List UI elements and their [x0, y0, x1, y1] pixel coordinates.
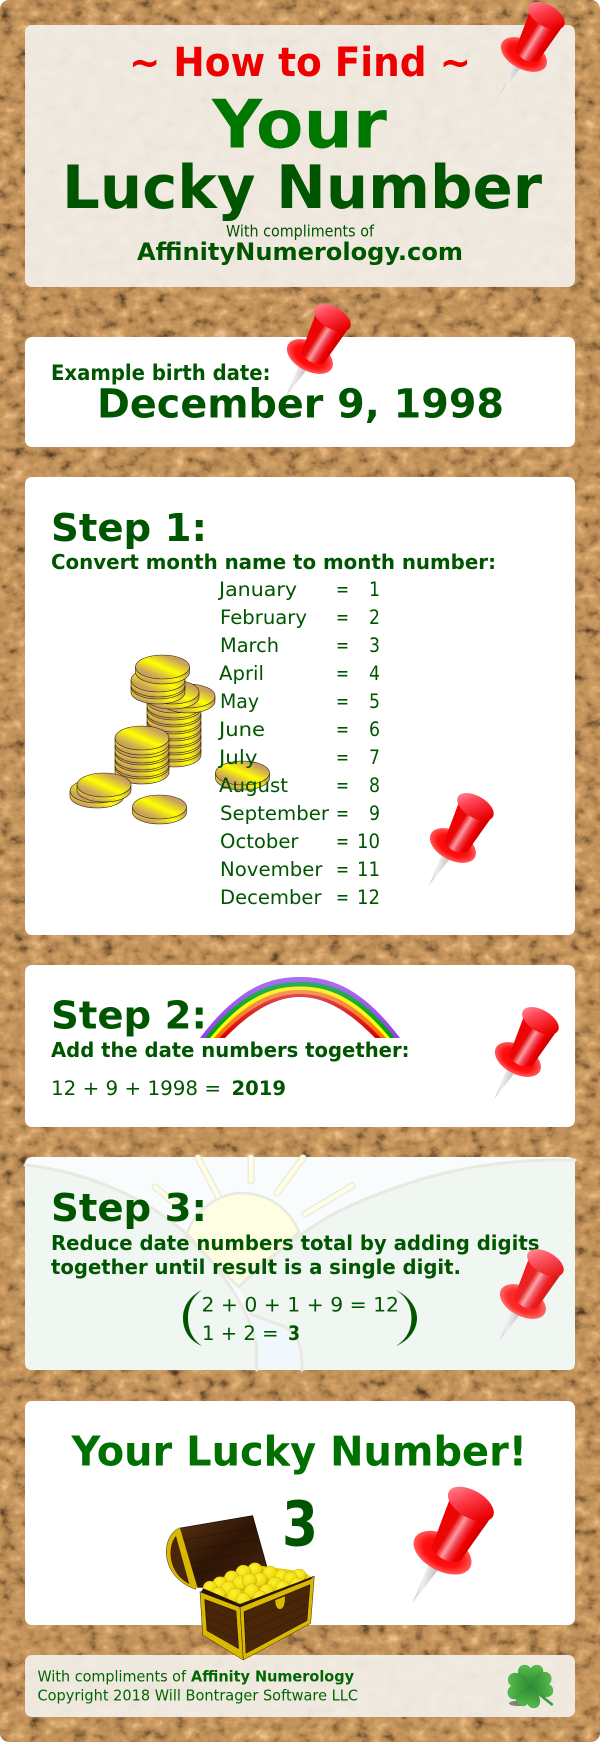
chest lock — [275, 1596, 285, 1609]
panel: footer — [25, 1655, 575, 1717]
month number table: 6 — [369, 718, 380, 741]
month number table: 3 — [369, 634, 380, 657]
result number 3: 3 — [282, 1488, 318, 1560]
text: step 2 instruction: Add the date numbers together: — [51, 1038, 410, 1062]
text: step 3 instruction: Reduce date numbers total by adding digits — [51, 1231, 540, 1255]
text: step 3 instruction: together until result is a single digit. — [51, 1255, 461, 1279]
month number table: May — [220, 690, 259, 713]
month number table: 4 — [369, 662, 380, 685]
month number table: = — [336, 662, 349, 685]
chest left face — [200, 1592, 243, 1660]
month number table: 2 — [369, 606, 380, 629]
icon: red push pin — [495, 0, 569, 94]
month number table: June — [217, 718, 265, 741]
month number table: February — [220, 606, 307, 629]
month number table: October — [220, 830, 299, 853]
month number table — [217, 578, 380, 909]
panel: example birth date — [25, 298, 575, 447]
panel: title — [25, 0, 575, 287]
gold treasure — [203, 1563, 313, 1607]
heading: your: Your — [211, 86, 387, 164]
icon: red push pin — [489, 1001, 563, 1099]
icon: four leaf clover — [508, 1665, 554, 1709]
chest lid side — [166, 1528, 196, 1589]
month number table: November — [220, 858, 323, 881]
panel: step 3 — [25, 1157, 575, 1370]
text: step 1 instruction: Convert month name to month number: — [51, 550, 496, 574]
equation with parentheses: 1 + 2 = — [202, 1322, 278, 1345]
text: step 3 instruction — [51, 1231, 540, 1279]
text: copyright line: Copyright 2018 Will Bontrager Software LLC — [38, 1686, 358, 1704]
heading: step 2: Step 2: — [51, 994, 207, 1038]
month number table: = — [336, 634, 349, 657]
month number table: 8 — [369, 774, 380, 797]
icon: gold coins — [70, 655, 270, 824]
month number table: = — [336, 830, 349, 853]
heading: how to find: ~ How to Find ~ — [129, 40, 471, 86]
chest lid interior — [178, 1516, 267, 1588]
month number table: December — [220, 886, 322, 909]
month number table: 11 — [357, 858, 380, 881]
panel: step 2 — [25, 965, 575, 1127]
text: with compliments of: With compliments of — [226, 222, 374, 240]
month number table: 5 — [369, 690, 380, 713]
month number table: January — [217, 578, 297, 601]
chest right face — [240, 1576, 314, 1660]
heading: lucky number: Lucky Number — [62, 153, 542, 223]
text: compliments line: Affinity Numerology — [191, 1668, 354, 1686]
month number table: = — [336, 746, 349, 769]
month number table: September — [220, 802, 330, 825]
text: example birth date label: Example birth date: — [51, 361, 270, 385]
heading: your lucky number: Your Lucky Number! — [71, 1428, 527, 1476]
equation with parentheses — [183, 1290, 417, 1346]
month number table: 10 — [357, 830, 380, 853]
text: website name: AffinityNumerology.com — [137, 238, 463, 266]
month number table: 9 — [369, 802, 380, 825]
panel: step 1 — [25, 477, 575, 935]
month number table: July — [217, 746, 258, 769]
equation with parentheses: 2 + 0 + 1 + 9 = 12 — [202, 1294, 399, 1316]
text: sum equation: 2019 — [232, 1077, 286, 1100]
background: faint sun and hills — [25, 1158, 575, 1370]
icon: red push pin — [424, 787, 498, 885]
month number table: = — [336, 886, 349, 909]
month number table: = — [336, 690, 349, 713]
panel: your lucky number result — [25, 1401, 575, 1625]
chest rim — [201, 1576, 314, 1607]
icon: red push pin — [494, 1243, 568, 1341]
icon: red push pin — [281, 298, 355, 396]
icon: treasure chest — [166, 1516, 314, 1660]
month number table: 1 — [369, 578, 380, 601]
equation with parentheses: 3 — [288, 1322, 300, 1345]
text: compliments line: With compliments of — [38, 1668, 187, 1686]
month number table: 12 — [357, 886, 380, 909]
text: sum equation: 12 + 9 + 1998 = — [51, 1077, 221, 1100]
text: compliments line — [38, 1668, 354, 1686]
month number table: = — [336, 802, 349, 825]
month number table: 7 — [369, 746, 380, 769]
month number table: March — [220, 634, 279, 657]
month number table: = — [336, 774, 349, 797]
month number table: = — [336, 858, 349, 881]
icon: rainbow — [200, 977, 400, 1038]
month number table: April — [219, 662, 264, 685]
heading: step 3: Step 3: — [51, 1186, 207, 1230]
month number table: = — [336, 606, 349, 629]
month number table: August — [219, 774, 288, 797]
month number table: = — [336, 578, 349, 601]
icon: red push pin — [406, 1479, 500, 1603]
text: december 9 1998: December 9, 1998 — [97, 382, 504, 428]
heading: step 1: Step 1: — [51, 506, 207, 550]
month number table: = — [336, 718, 349, 741]
